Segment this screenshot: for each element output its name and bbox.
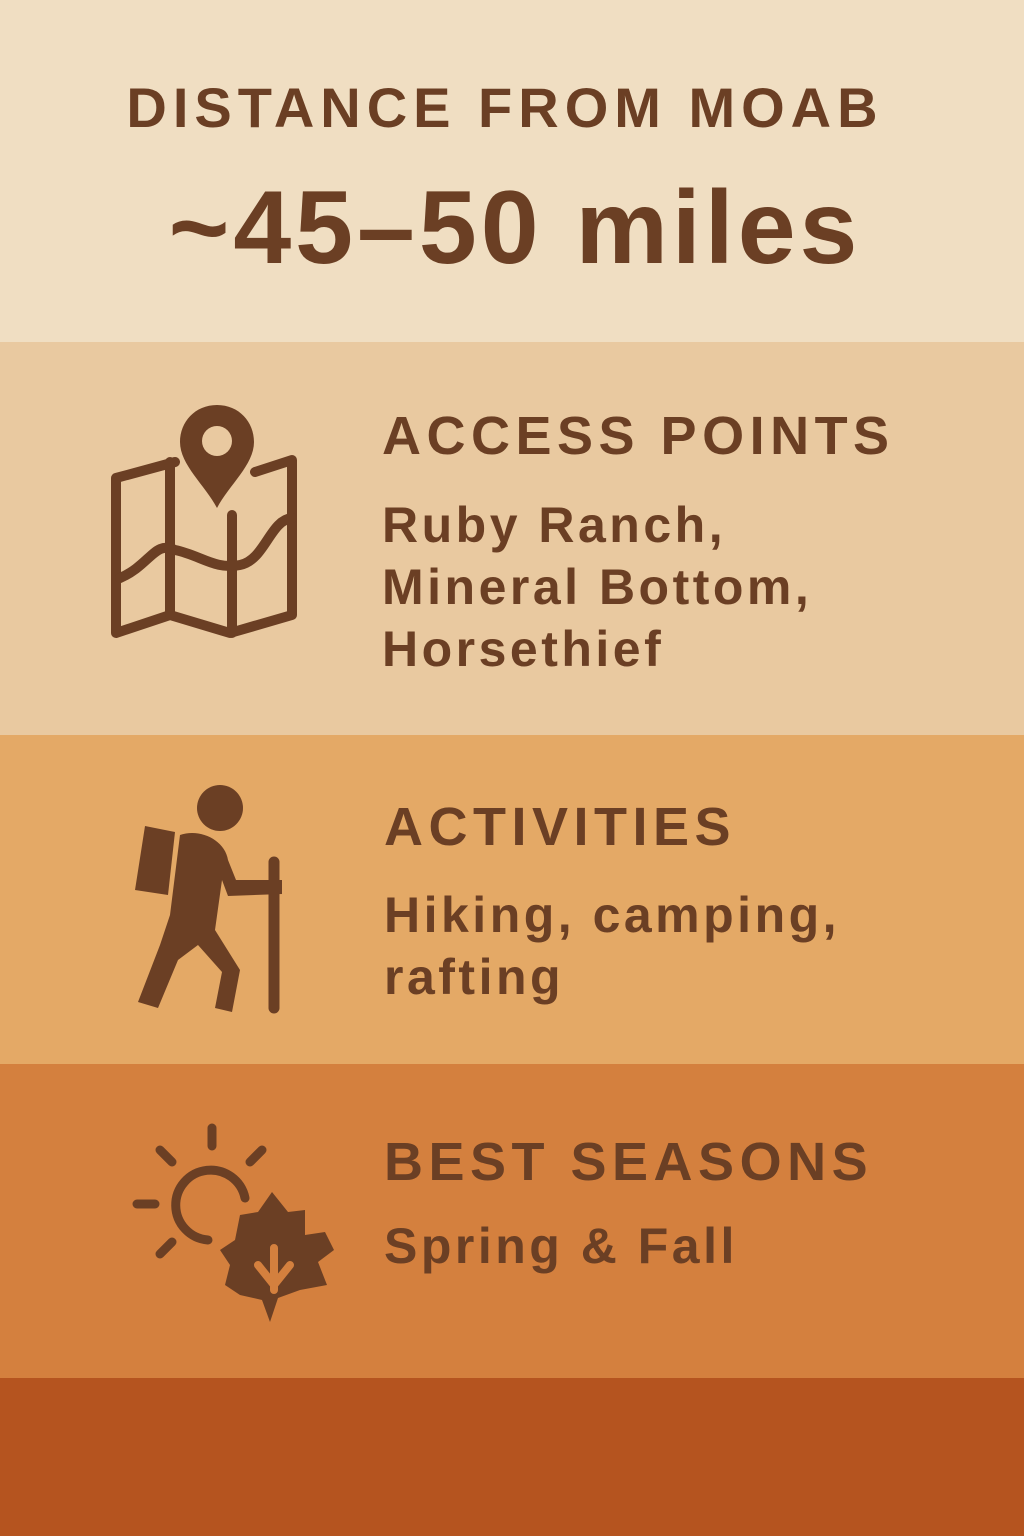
text: access points: Horsethief — [382, 621, 664, 677]
text: activities — [384, 887, 840, 1005]
text: access points — [382, 497, 812, 677]
panel: access points — [0, 342, 1024, 735]
heading: activities: ACTIVITIES — [384, 797, 736, 857]
icon: map with pin — [111, 405, 297, 638]
text: activities: rafting — [384, 949, 564, 1005]
heading: best seasons: BEST SEASONS — [384, 1132, 873, 1192]
distance value: ~45–50 miles — [169, 170, 861, 286]
icon: hiker — [135, 785, 282, 1014]
icon: sun and leaf — [132, 1124, 334, 1322]
panel: best seasons — [0, 1064, 1024, 1378]
footer band — [0, 1378, 1024, 1536]
panel: activities — [0, 735, 1024, 1064]
panel: distance — [0, 0, 1024, 342]
text: best seasons: Spring & Fall — [384, 1218, 738, 1274]
title: DISTANCE FROM MOAB — [126, 76, 884, 139]
text: access points: Mineral Bottom, — [382, 559, 812, 615]
text: access points: Ruby Ranch, — [382, 497, 726, 553]
heading: access points: ACCESS POINTS — [382, 406, 895, 466]
text: activities: Hiking, camping, — [384, 887, 840, 943]
